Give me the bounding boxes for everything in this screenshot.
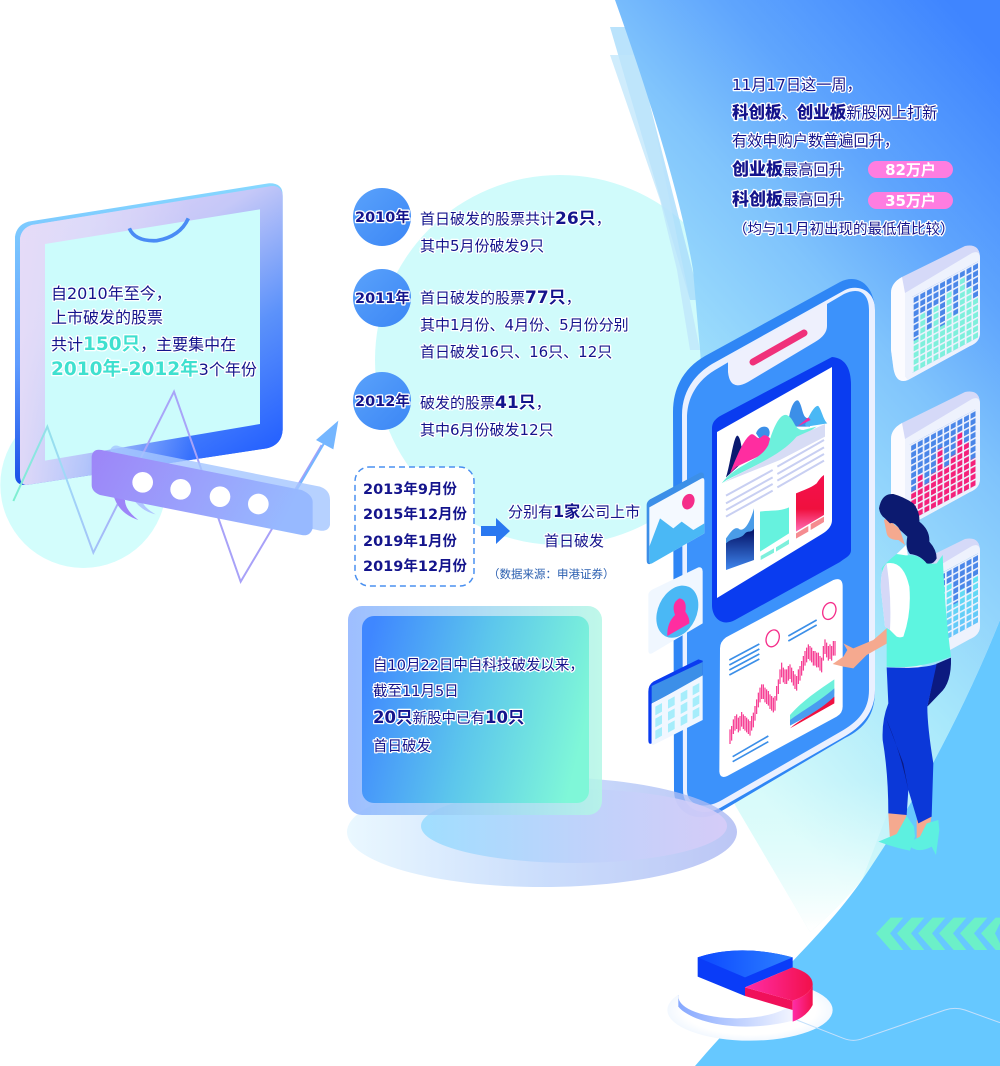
panel: left monitor with summary [0, 183, 338, 582]
panel: top-right text block [732, 76, 954, 238]
panel: right heatmap tiles [891, 246, 980, 674]
text: summary since 2010: 2010年-2012年3个年份 [51, 358, 257, 380]
text: one company each [508, 502, 640, 550]
panel: top-right text block: 科创板、创业板新股网上打新 [732, 102, 937, 122]
timeline 2011 [353, 269, 629, 361]
background: gradient blue panel [615, 0, 1000, 932]
timeline 2010: 2010年 [355, 208, 410, 226]
timeline 2011: 2011年 [355, 289, 410, 307]
blue slice [698, 950, 793, 996]
neck and face [884, 518, 905, 545]
text: new stocks note: 自10月22日中自科技破发以来， [373, 657, 584, 674]
background: translucent strips [610, 27, 700, 350]
icon: cyan circle behind monitor [0, 402, 166, 568]
calendar card [648, 659, 703, 745]
timeline 2010: 其中5月份破发9只 [420, 237, 544, 255]
text: new stocks note: 首日破发 [373, 738, 431, 755]
pill: 82万户 [868, 161, 953, 179]
panel: dashed date list: 2019年1月份 [363, 532, 457, 550]
upper tablet screen [712, 357, 851, 622]
panel: phone illustration [647, 279, 875, 817]
ear [891, 526, 899, 534]
legs, shoes and arm [833, 628, 951, 855]
timeline 2012: 其中6月份破发12只 [420, 421, 554, 439]
ring icons [764, 601, 838, 649]
timeline 2012: 2012年 [355, 392, 410, 410]
text: new stocks note: 20只新股中已有10只 [373, 708, 524, 727]
mini area chart [790, 679, 834, 723]
area chart on tablet [722, 400, 827, 483]
decorative pale base [667, 979, 833, 1041]
base line [797, 1008, 1000, 1040]
chart line: zigzag trend with arrow [13, 392, 338, 582]
timeline 2011: 其中1月份、4月份、5月份分别 [420, 316, 629, 334]
panel: base ellipses [347, 777, 737, 887]
panel: dashed date list [355, 467, 474, 586]
icon: speech bubble with dots [92, 446, 330, 535]
panel: dashed date list: 2015年12月份 [363, 505, 468, 523]
timeline 2010 [353, 188, 611, 255]
phone notch [728, 302, 827, 385]
panel: top-right text block: 创业板最高回升 [732, 159, 844, 180]
pants [927, 658, 951, 707]
panel: dashed date list: 2013年9月份 [363, 480, 457, 498]
text: one company each: 分别有1家公司上市 [508, 502, 640, 521]
arm and hand [833, 628, 896, 668]
hair [879, 494, 937, 564]
text: summary since 2010: 自2010年至今， [51, 284, 172, 303]
text: one company each: 首日破发 [544, 532, 604, 550]
image card [647, 472, 704, 564]
background: pale cyan circle behind timeline [375, 175, 745, 545]
timeline 2011: 首日破发16只、16只、12只 [420, 343, 612, 361]
mini bar charts on tablet [726, 475, 824, 570]
vest [882, 554, 951, 667]
panel: gradient info box [348, 606, 602, 815]
text: summary since 2010: 共计150只，主要集中在 [51, 334, 236, 355]
phone body [673, 279, 875, 817]
panel: pie chart [667, 918, 1000, 1041]
panel: top-right text block: 科创板最高回升 [732, 189, 844, 210]
timeline 2011: 首日破发的股票77只， [420, 288, 581, 308]
monitor illustration [15, 183, 283, 485]
lower chart screen [719, 579, 843, 777]
text lines on tablet [726, 440, 824, 517]
text: new stocks note: 截至11月5日 [373, 683, 459, 700]
arrow: dates to note [481, 518, 510, 544]
upper body and hair [879, 494, 951, 667]
text: summary since 2010 [51, 284, 257, 380]
panel: timeline 2010-2012 [353, 188, 629, 439]
illustration: woman pointing at the phone [833, 494, 951, 855]
timeline 2010: 首日破发的股票共计26只， [420, 209, 611, 229]
heatmap tile 1 [891, 246, 980, 381]
pie disc [678, 995, 795, 1027]
avatar card [648, 567, 706, 654]
candlestick chart [730, 639, 835, 744]
timeline 2012 [353, 372, 554, 439]
panel: top-right text block: 有效申购户数普遍回升， [732, 132, 899, 150]
collar [896, 545, 908, 556]
text: data source: （数据来源：申港证券） [488, 567, 614, 581]
pill: 82万户: 82万户 [885, 161, 936, 179]
text: summary since 2010: 上市破发的股票 [51, 308, 163, 327]
chevrons [876, 918, 1000, 950]
timeline 2012: 破发的股票41只， [420, 393, 551, 413]
panel: top-right text block: （均与11月初出现的最低值比较） [733, 220, 954, 238]
heatmap tile 2 [891, 392, 980, 527]
leg skin and shoes [888, 813, 932, 847]
text lines on lower screen [729, 620, 817, 762]
heatmap tile 3 [891, 538, 980, 674]
text: new stocks note [373, 657, 584, 755]
pink slice [745, 987, 793, 1010]
background: lower sky-blue sweep [695, 620, 1000, 1066]
panel: dashed date list: 2019年12月份 [363, 557, 468, 575]
panel: top-right text block: 11月17日这一周， [732, 76, 862, 94]
sleeve [881, 563, 910, 637]
pill: 35万户: 35万户 [885, 192, 936, 210]
pill: 35万户 [868, 192, 953, 210]
